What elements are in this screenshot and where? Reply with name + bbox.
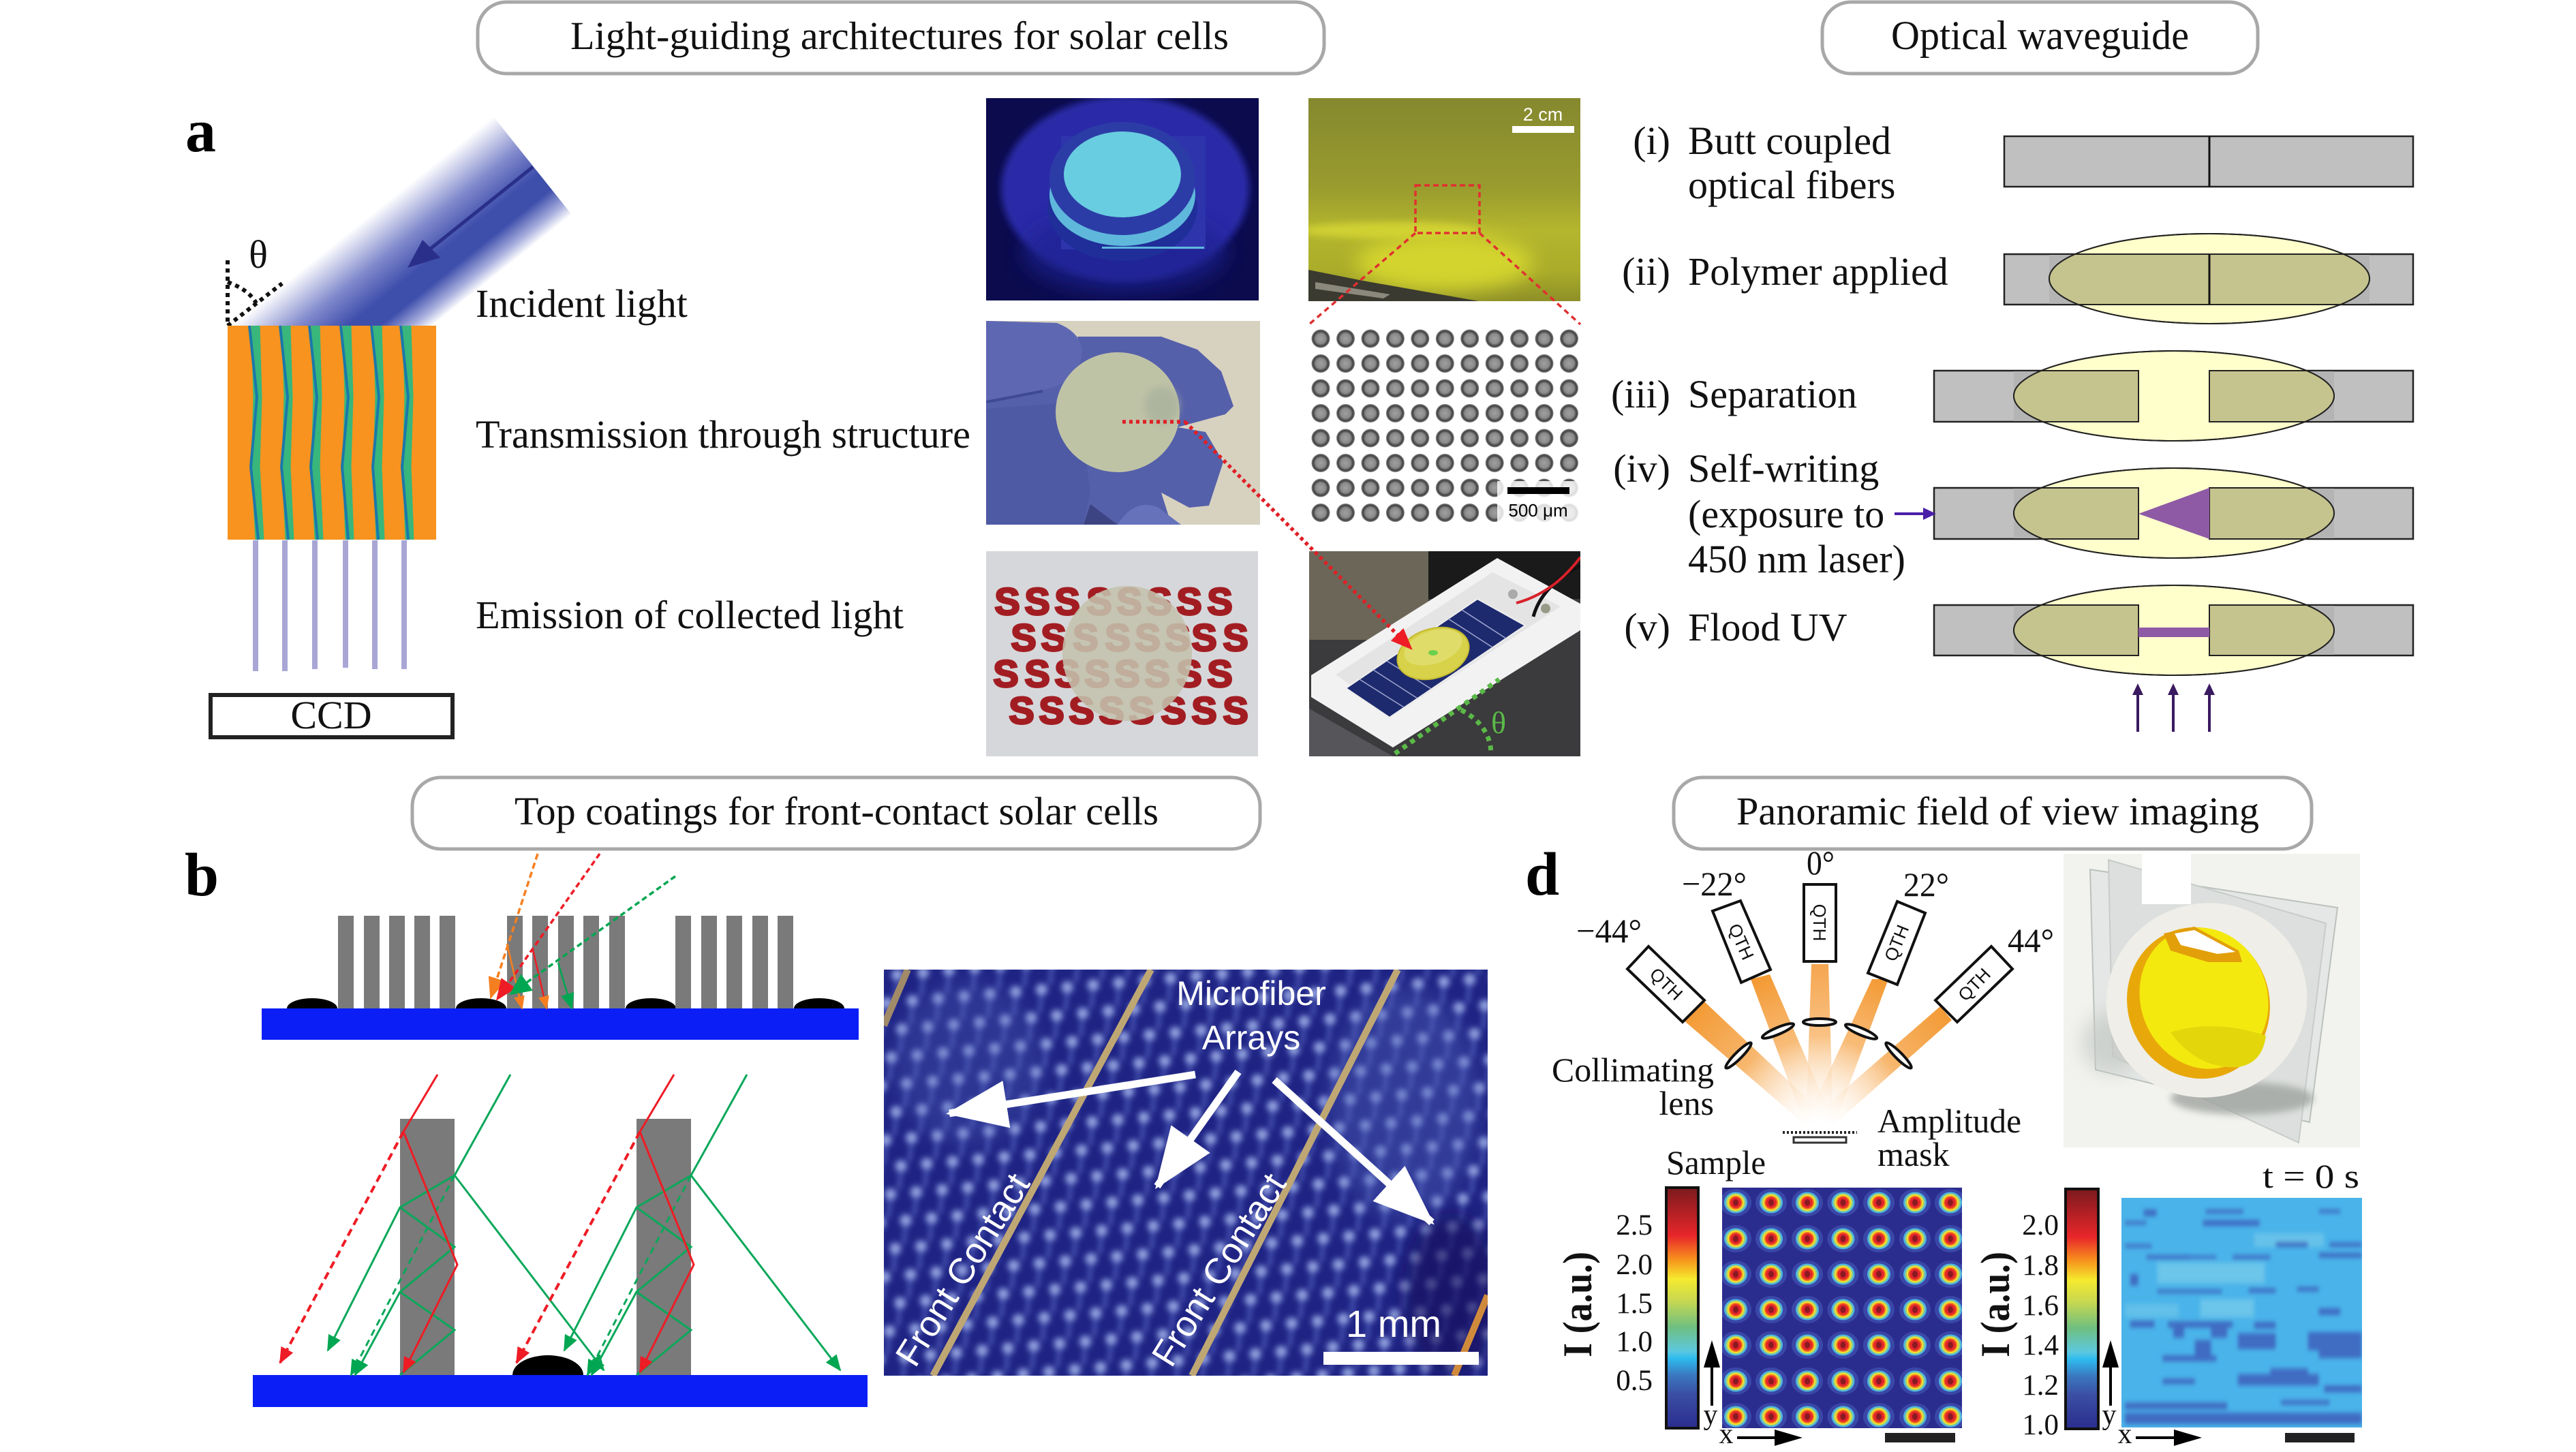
UV arrows [2132, 683, 2215, 732]
step iv: self-writing: (exposure to [1688, 492, 1884, 536]
step ii: polymer applied [1622, 234, 2413, 324]
photo: tilted solar cell: θ [1491, 705, 1506, 740]
amplitude mask and sample [1783, 1132, 1857, 1143]
microfiber arrays [338, 916, 793, 1008]
step ii: polymer applied: (ii) [1622, 249, 1670, 294]
y axis title: I (a.u.) [1555, 1252, 1600, 1357]
waveguide fibers [249, 326, 410, 540]
photo: blue glowing sample [986, 98, 1259, 300]
heading: panoramic imaging [1674, 777, 2312, 849]
step i: butt coupled fibers: Butt coupled [1688, 119, 1891, 163]
panel label b: b [185, 841, 219, 909]
angle markers [228, 260, 282, 326]
emitted light lines [256, 540, 404, 671]
panel label a: a [185, 97, 216, 165]
ray paths first microfiber [280, 1075, 604, 1375]
light rays [496, 854, 675, 1008]
tick labels: 2.0 [2022, 1209, 2059, 1241]
step iii: separation [1611, 351, 2413, 441]
angle labels: 44° [2008, 921, 2054, 959]
heat map spots [1720, 1188, 1966, 1430]
tick labels: 1.4 [2022, 1329, 2059, 1361]
photo: disc over S letter sheet: SSSSSSSS [1009, 689, 1248, 732]
y axis arrow [2102, 1340, 2119, 1431]
label: amplitude mask: Amplitude [1877, 1102, 2021, 1140]
photo: microfiber arrays on contacts: Front Contact [888, 1167, 1038, 1374]
scale bar [2285, 1433, 2355, 1442]
panel: light-guiding schematic [211, 117, 572, 737]
CCD box: CCD [290, 693, 372, 737]
label: collimating lens: lens [1659, 1084, 1714, 1122]
zoom guide lines [1309, 233, 1580, 324]
step i: butt coupled fibers: optical fibers [1688, 163, 1895, 207]
heading: top coatings: Top coatings for front-contact solar cells [515, 789, 1159, 833]
QTH labels: QTH [1954, 964, 1995, 1005]
step i: butt coupled fibers [1633, 119, 2413, 207]
ray paths second microfiber [517, 1075, 840, 1375]
tick labels: 1.0 [1616, 1326, 1653, 1358]
label: emission: Emission of collected light [476, 593, 904, 637]
photo: microfiber arrays on contacts [884, 970, 1488, 1376]
angle labels: 22° [1903, 865, 1949, 903]
label: collimating lens [1552, 1051, 1714, 1122]
panel label d: d [1525, 841, 1559, 908]
step v: flood UV [1624, 585, 2413, 675]
label: sample: Sample [1666, 1143, 1766, 1181]
heading: light-guiding architectures [478, 2, 1324, 74]
front contact [512, 1355, 583, 1375]
front contacts [287, 998, 844, 1008]
step v: flood UV: (v) [1624, 605, 1670, 649]
photo: disc over S letter sheet: SSSSSSSS [993, 652, 1233, 695]
photo: yellow sample: 2 cm [1523, 104, 1563, 125]
step iv: self-writing [1613, 446, 2413, 581]
tick labels: 0.5 [1616, 1365, 1653, 1397]
photo: microfiber array micrograph [1311, 330, 1578, 522]
CCD box [211, 693, 453, 737]
laser arrow [1895, 508, 1936, 520]
label: incident light: Incident light [476, 281, 688, 326]
photo: microfiber arrays on contacts: Microfiber [1176, 974, 1326, 1013]
angle labels: 0° [1807, 844, 1835, 882]
angle labels [1576, 844, 2054, 959]
colour map chart: amplitude mask [1555, 1188, 1966, 1450]
y axis arrow: y [2102, 1400, 2117, 1431]
step i: butt coupled fibers: (i) [1633, 119, 1670, 163]
theta symbol: θ [249, 232, 268, 277]
tick labels [2022, 1209, 2059, 1441]
tick labels: 1.6 [2022, 1290, 2059, 1322]
silicon substrate [262, 1008, 859, 1040]
tick labels [1616, 1209, 1653, 1397]
heading: optical waveguide [1822, 2, 2258, 74]
step iv: self-writing: (iv) [1613, 446, 1670, 491]
photo: microfiber arrays on contacts: Arrays [1202, 1019, 1300, 1057]
colour map chart: t = 0 s [1973, 1189, 2362, 1450]
step iii: separation: (iii) [1611, 372, 1670, 416]
heat map intensity field [2121, 1198, 2362, 1427]
photo: tilted solar cell [1309, 551, 1580, 756]
photo: disc over S letter sheet: SSSSSSSS [994, 580, 1233, 623]
dotted red arrow connecting disc to solar cell [1122, 422, 1399, 636]
angle labels: −44° [1576, 912, 1642, 950]
heading: top coatings [412, 777, 1260, 849]
QTH labels [1646, 904, 1995, 1005]
panel: coating schematic top [262, 854, 859, 1040]
heading: light-guiding architectures: Light-guiding architectures for solar cells [570, 14, 1229, 58]
step v: flood UV: Flood UV [1688, 605, 1847, 649]
photo: disc held in gloved hand [986, 321, 1260, 525]
y axis arrow: y [1704, 1400, 1717, 1431]
label: amplitude mask [1877, 1102, 2021, 1173]
photo: microfiber array micrograph: 500 μm [1508, 500, 1568, 521]
tick labels: 1.2 [2022, 1370, 2059, 1402]
heading: optical waveguide: Optical waveguide [1891, 13, 2189, 58]
x axis arrow [1719, 1419, 1803, 1450]
photo: microfiber arrays on contacts: 1 mm [1346, 1302, 1441, 1345]
y axis title: I (a.u.) [1973, 1252, 2018, 1357]
incident light beam [228, 117, 572, 326]
photo: microfiber arrays on contacts: Front Contact [1144, 1167, 1294, 1374]
step ii: polymer applied: Polymer applied [1688, 249, 1948, 294]
QTH labels: QTH [1646, 963, 1687, 1004]
panel: optical waveguide steps [1611, 119, 2413, 732]
QTH labels: QTH [1809, 904, 1830, 941]
photo: disc over S letter sheet [986, 551, 1258, 756]
microfibers [400, 1119, 691, 1375]
angle labels: −22° [1682, 865, 1747, 903]
photo: yellow sample [1308, 98, 1580, 301]
tick labels: 2.0 [1616, 1249, 1653, 1281]
scale bar [1885, 1433, 1955, 1442]
orange waveguide block [228, 326, 436, 540]
x axis arrow [2118, 1419, 2202, 1450]
colour bar [2066, 1189, 2098, 1429]
step iv: self-writing: 450 nm laser) [1688, 537, 1905, 581]
label: amplitude mask: mask [1877, 1135, 1950, 1173]
panel: coating schematic bottom [253, 1075, 868, 1407]
tick labels: 1.5 [1616, 1288, 1653, 1320]
tick labels: 2.5 [1616, 1209, 1653, 1241]
x axis arrow: x [2118, 1419, 2132, 1450]
label: collimating lens: Collimating [1552, 1051, 1714, 1089]
QTH lamps [1627, 884, 2012, 1022]
photo: yellow sample between glass [2064, 854, 2360, 1147]
collimating lenses [1723, 1019, 1914, 1070]
QTH labels: QTH [1724, 921, 1758, 963]
x axis arrow: x [1719, 1419, 1734, 1450]
photo: disc over S letter sheet: SSSSSSSS [1011, 616, 1248, 659]
colour bar [1666, 1188, 1698, 1428]
label: transmission: Transmission through structure [476, 412, 970, 457]
step iii: separation: Separation [1688, 372, 1857, 416]
panel: panoramic imaging setup [1552, 844, 2054, 1181]
tick labels: 1.0 [2022, 1409, 2059, 1441]
y axis arrow [1704, 1340, 1720, 1431]
heading: panoramic imaging: Panoramic field of view imaging [1736, 789, 2259, 833]
light beams [1683, 964, 1952, 1124]
QTH labels: QTH [1880, 922, 1913, 964]
step iv: self-writing: Self-writing [1688, 446, 1879, 491]
tick labels: 1.8 [2022, 1250, 2059, 1282]
label: t = 0 s: t = 0 s [2263, 1157, 2359, 1195]
beam arrow [408, 167, 533, 268]
substrate [253, 1375, 868, 1407]
